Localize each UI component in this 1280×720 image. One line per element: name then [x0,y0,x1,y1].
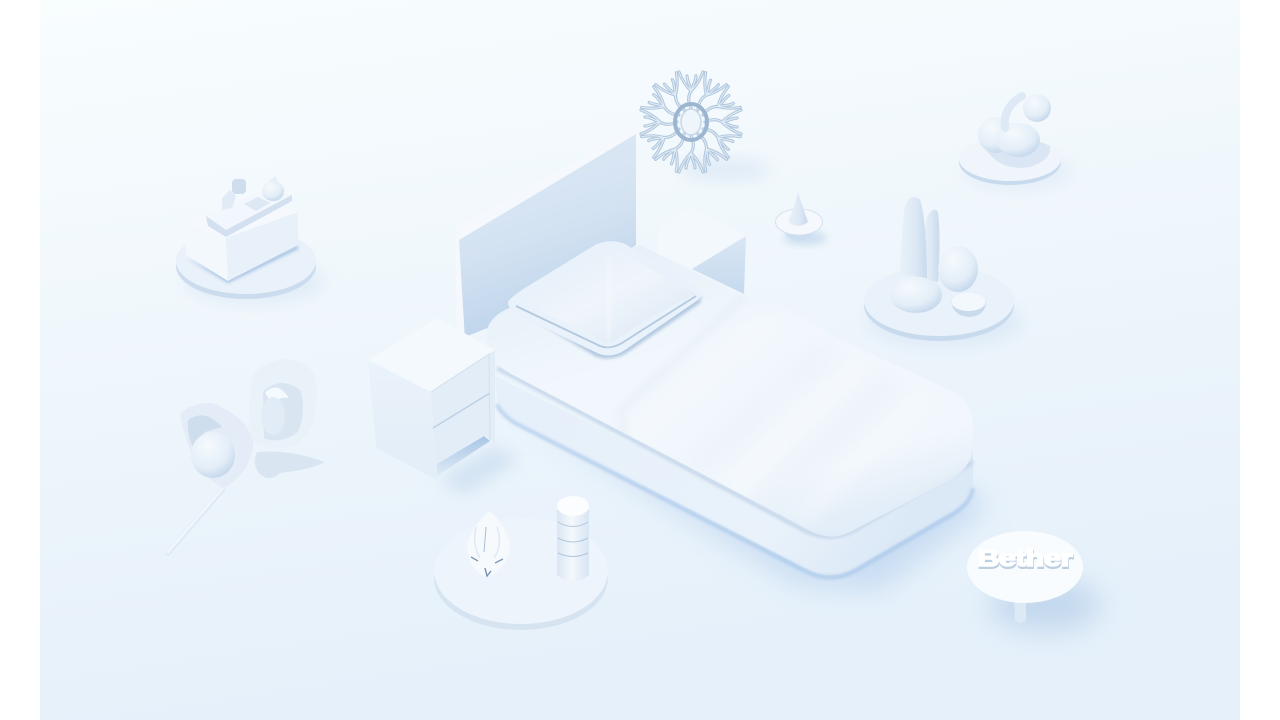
shadow edge beneath base [497,404,973,578]
tray with small items [205,191,292,230]
left plate with box and objects [176,176,316,299]
bed [487,241,980,578]
egg [938,246,978,292]
stem [168,489,223,553]
right plate with vases [864,197,1014,341]
pillow [508,241,702,359]
table stem [1014,600,1026,623]
left nightstand [368,318,495,480]
tall vase pair [920,210,940,282]
box [184,224,228,281]
pebble [890,277,942,313]
round table with logo [967,531,1083,623]
ribbon flower [168,359,325,553]
wing [255,451,325,478]
leaf mask [467,511,510,576]
stacked cylinder [557,496,589,582]
mattress and duvet [487,245,980,545]
spinning top ornament [776,192,822,241]
bowl [951,301,986,317]
starburst ornament [641,72,741,172]
logo wordmark: Bether [978,547,1073,573]
bed base [495,376,973,575]
bottom disc with leaf mask and cylinder [434,496,608,630]
groove under mattress [497,368,973,537]
round table with logo: Bether [978,545,1073,571]
headboard [455,126,636,340]
right nightstand [658,208,746,294]
top right sculpture on plate [959,94,1061,185]
bud [191,432,235,478]
soft floor shadows [185,154,1100,631]
right loop [249,359,317,448]
left lobe [180,403,253,488]
